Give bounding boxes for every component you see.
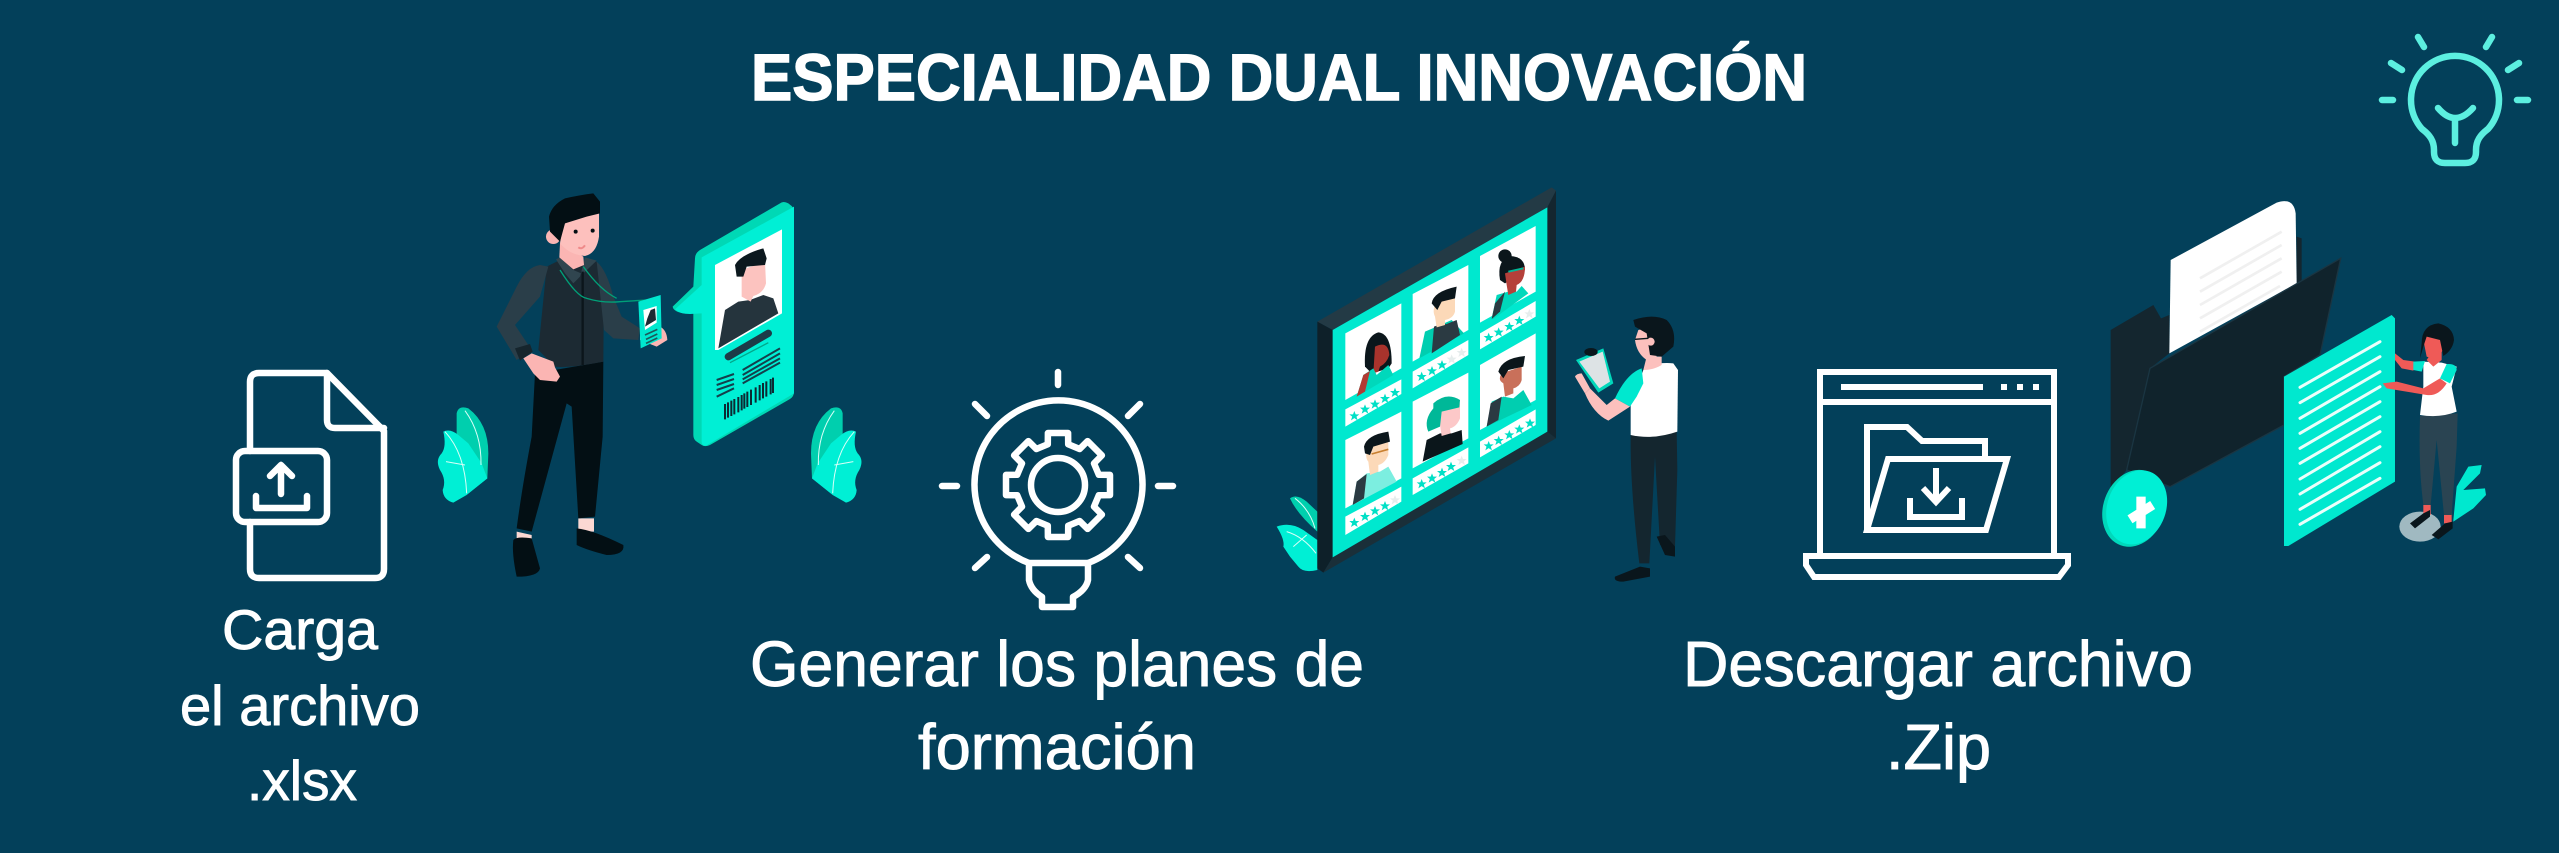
portrait: man bottom-left [1353, 432, 1397, 505]
board frame [1317, 187, 1556, 573]
right leaf [811, 407, 861, 503]
step 1 label: Carga [222, 598, 379, 661]
step 2: gear light bulb icon [942, 372, 1173, 607]
portrait: woman top-right [1492, 249, 1528, 319]
woman holding document [2383, 323, 2486, 542]
step 3 label: .Zip [1886, 711, 1991, 783]
step 1: upload file icon [236, 373, 384, 578]
left leaf [438, 407, 488, 503]
star ratings [1349, 309, 1535, 527]
illustration: man with ID badge [438, 193, 861, 577]
step 1 label [180, 598, 420, 812]
step 3 label: Descargar archivo [1683, 628, 2193, 700]
teal document [2284, 315, 2395, 546]
step 2 label [750, 628, 1364, 783]
portrait: woman bottom-middle [1423, 397, 1463, 462]
step 3 label [1683, 628, 2193, 783]
icon: small light bulb [2382, 37, 2528, 163]
man figure [497, 193, 667, 577]
illustration: evaluation board with person [1277, 187, 1678, 582]
candidate cards [1345, 226, 1536, 535]
man holding clipboard [1575, 317, 1678, 582]
step 1 label: .xlsx [247, 749, 357, 812]
plus badge [2092, 461, 2177, 556]
portrait: man bottom-right [1487, 356, 1532, 427]
portrait: woman top-left [1357, 332, 1393, 397]
title: ESPECIALIDAD DUAL INNOVACIÓN [751, 40, 1807, 114]
ID card callout [673, 202, 794, 446]
dark folder with paper [2111, 201, 2341, 490]
illustration: folder with document and woman [2092, 201, 2486, 556]
step 3: laptop download icon [1806, 372, 2068, 577]
step 2 label: Generar los planes de [750, 628, 1364, 700]
step 1 label: el archivo [180, 674, 420, 737]
step 2 label: formación [918, 711, 1196, 783]
leaf behind board [1277, 496, 1317, 571]
portrait: man top-middle [1419, 287, 1464, 358]
